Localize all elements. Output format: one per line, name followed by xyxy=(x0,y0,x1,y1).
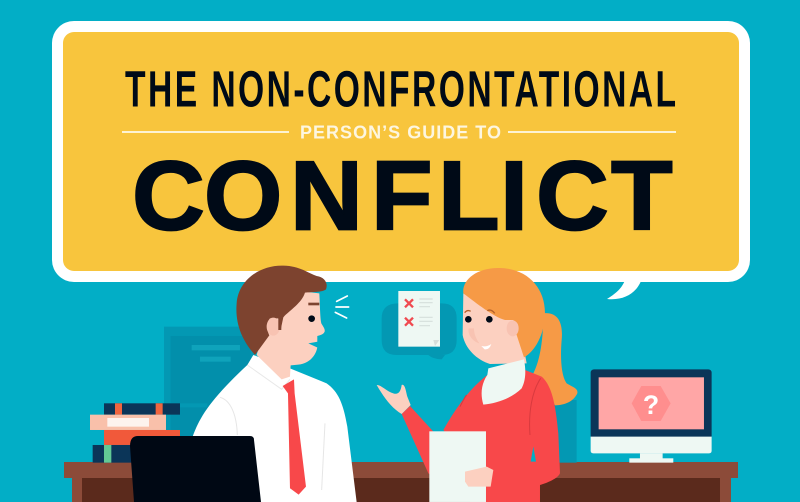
man xyxy=(160,266,357,502)
speech bubble panel xyxy=(52,21,750,299)
man ear xyxy=(267,318,280,336)
woman nose shadow xyxy=(468,328,479,343)
panel behind woman xyxy=(550,400,577,463)
subtitle: person's guide to: PERSON’S GUIDE TO xyxy=(300,122,501,142)
man shirt xyxy=(160,355,357,502)
woman collar xyxy=(482,359,525,405)
man neck and head xyxy=(257,292,325,379)
laptop xyxy=(130,436,261,502)
paper held xyxy=(429,431,486,502)
title: the non-confrontational: THE NON-CONFRONTATIONAL xyxy=(125,62,676,118)
thought bubble xyxy=(382,303,457,359)
ponytail xyxy=(533,313,577,405)
background panel behind man xyxy=(164,327,254,437)
book stack xyxy=(90,403,180,463)
woman ear xyxy=(507,320,519,336)
document with crosses xyxy=(398,291,440,347)
woman face xyxy=(463,293,527,364)
woman hair xyxy=(463,268,545,357)
monitor xyxy=(591,369,712,463)
monitor: ? xyxy=(643,390,659,420)
desk xyxy=(64,462,738,502)
title: conflict: CONFLICT xyxy=(132,142,673,251)
man tie xyxy=(283,379,306,495)
woman hand on paper xyxy=(465,467,493,487)
woman eyes, brows and smile xyxy=(465,310,495,349)
man hair xyxy=(236,266,327,355)
woman arm and hand xyxy=(402,406,437,480)
surprise marks xyxy=(335,296,349,318)
man brow, eye and mouth xyxy=(308,300,319,308)
woman's illustrations xyxy=(377,268,712,502)
woman sweater xyxy=(443,370,560,502)
